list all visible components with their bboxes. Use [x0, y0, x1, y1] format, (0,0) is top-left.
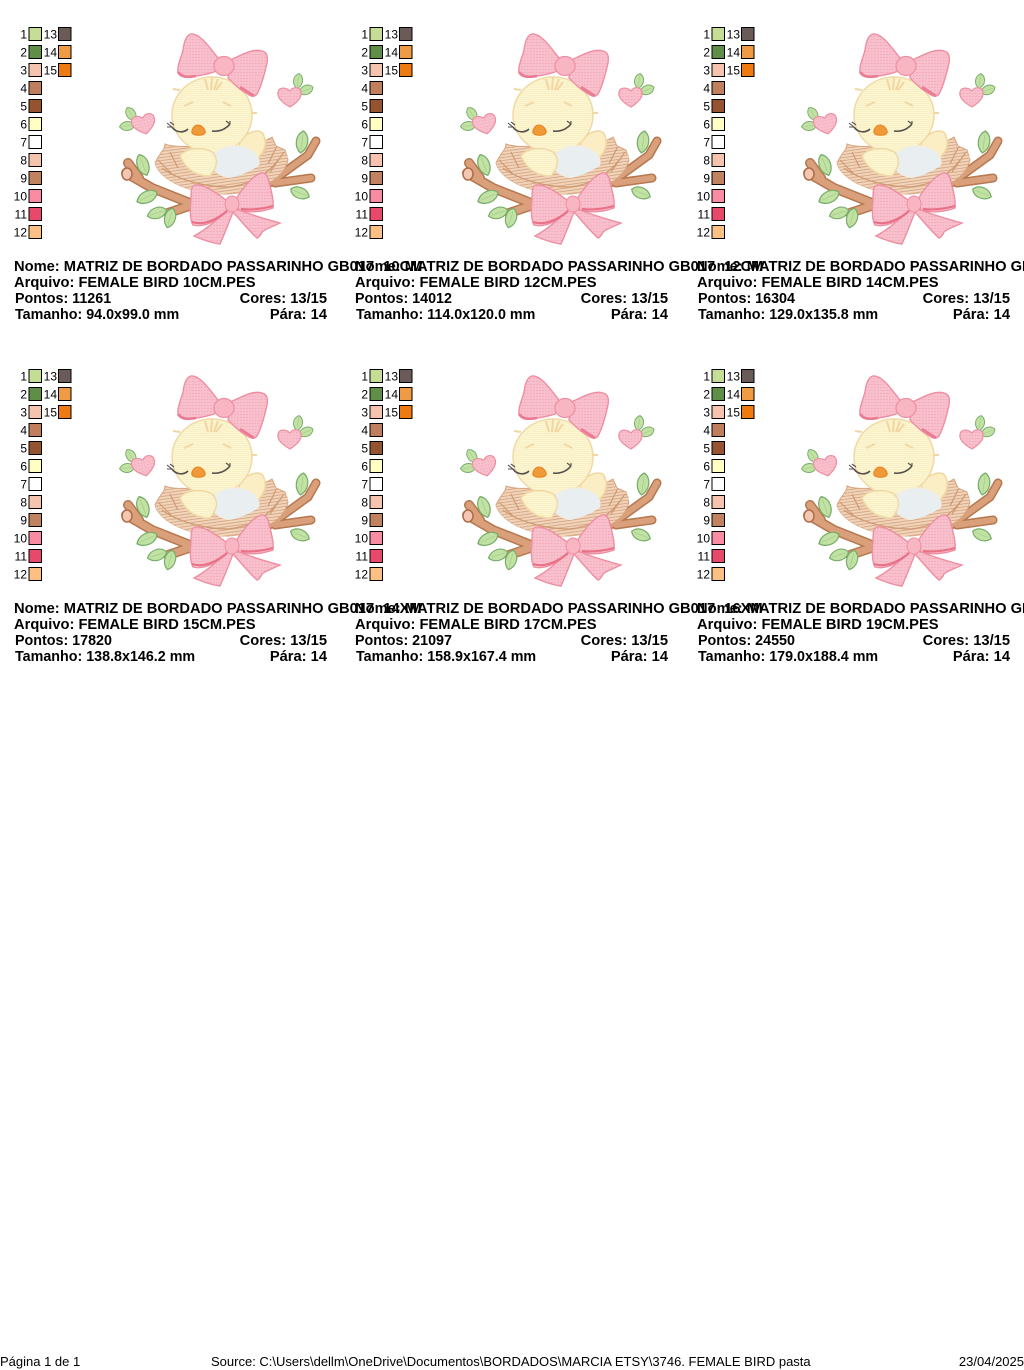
design details	[14, 259, 422, 323]
embroidery image: chick in nest	[460, 376, 657, 586]
design details: Pontos: 21097	[355, 633, 452, 649]
page footer: Source: C:\Users\dellm\OneDrive\Documentos\BORDADOS\MARCIA ETSY\3746. FEMALE BIRD pasta	[211, 1354, 811, 1369]
design details: Pára: 14	[611, 649, 669, 665]
design details: Pára: 14	[270, 307, 328, 323]
page footer: 23/04/2025	[959, 1354, 1024, 1369]
design details: Arquivo: FEMALE BIRD 10CM.PES	[14, 275, 256, 291]
design details: Cores: 13/15	[581, 633, 668, 649]
design details: Pontos: 24550	[698, 633, 795, 649]
design details	[697, 601, 1024, 665]
design details	[697, 259, 1024, 323]
design details: Nome: MATRIZ DE BORDADO PASSARINHO GB017 14XM	[14, 601, 422, 617]
design details	[14, 601, 422, 665]
embroidery image: chick in nest	[801, 34, 998, 244]
embroidery image: chick in nest	[119, 376, 316, 586]
design details: Cores: 13/15	[923, 633, 1010, 649]
design details: Tamanho: 158.9x167.4 mm	[356, 649, 536, 665]
color legend	[14, 370, 71, 582]
design details: Arquivo: FEMALE BIRD 17CM.PES	[355, 617, 597, 633]
page footer: Página 1 de 1	[0, 1354, 80, 1369]
panel: design 10cm	[14, 28, 422, 323]
design details: Cores: 13/15	[923, 291, 1010, 307]
design details: Cores: 13/15	[240, 633, 327, 649]
panel: design 15cm	[14, 370, 422, 665]
color legend	[697, 370, 754, 582]
design details: Pontos: 17820	[15, 633, 112, 649]
panel: design 17cm	[355, 370, 763, 665]
design details: Arquivo: FEMALE BIRD 12CM.PES	[355, 275, 597, 291]
page footer	[0, 1354, 1024, 1369]
embroidery image: chick in nest	[119, 34, 316, 244]
design details: Pára: 14	[270, 649, 328, 665]
design details	[355, 601, 763, 665]
embroidery image: chick in nest	[460, 34, 657, 244]
design details	[355, 259, 763, 323]
panel: design 19cm	[697, 370, 1024, 665]
color legend	[355, 28, 412, 240]
design details: Arquivo: FEMALE BIRD 14CM.PES	[697, 275, 939, 291]
color legend	[697, 28, 754, 240]
design details: Arquivo: FEMALE BIRD 15CM.PES	[14, 617, 256, 633]
design details: Tamanho: 94.0x99.0 mm	[15, 307, 179, 323]
design details: Tamanho: 138.8x146.2 mm	[15, 649, 195, 665]
design details: Arquivo: FEMALE BIRD 19CM.PES	[697, 617, 939, 633]
design details: Pontos: 11261	[15, 291, 111, 307]
design details: Tamanho: 114.0x120.0 mm	[356, 307, 535, 323]
design details: Pára: 14	[953, 649, 1011, 665]
color legend	[14, 28, 71, 240]
design details: Pontos: 16304	[698, 291, 795, 307]
embroidery image: chick in nest	[801, 376, 998, 586]
design details: Tamanho: 179.0x188.4 mm	[698, 649, 878, 665]
design details: Nome: MATRIZ DE BORDADO PASSARINHO GB017 12CM	[355, 259, 763, 275]
color legend	[355, 370, 412, 582]
panel: design 14cm	[697, 28, 1024, 323]
design details: Tamanho: 129.0x135.8 mm	[698, 307, 878, 323]
design details: Cores: 13/15	[240, 291, 327, 307]
design details: Pára: 14	[611, 307, 669, 323]
design details: Cores: 13/15	[581, 291, 668, 307]
design details: Nome: MATRIZ DE BORDADO PASSARINHO GB017 10CM	[14, 259, 422, 275]
panel: design 12cm	[355, 28, 763, 323]
design details: Pontos: 14012	[355, 291, 452, 307]
design details: Nome: MATRIZ DE BORDADO PASSARINHO GB017 16XM	[355, 601, 763, 617]
design details: Pára: 14	[953, 307, 1011, 323]
